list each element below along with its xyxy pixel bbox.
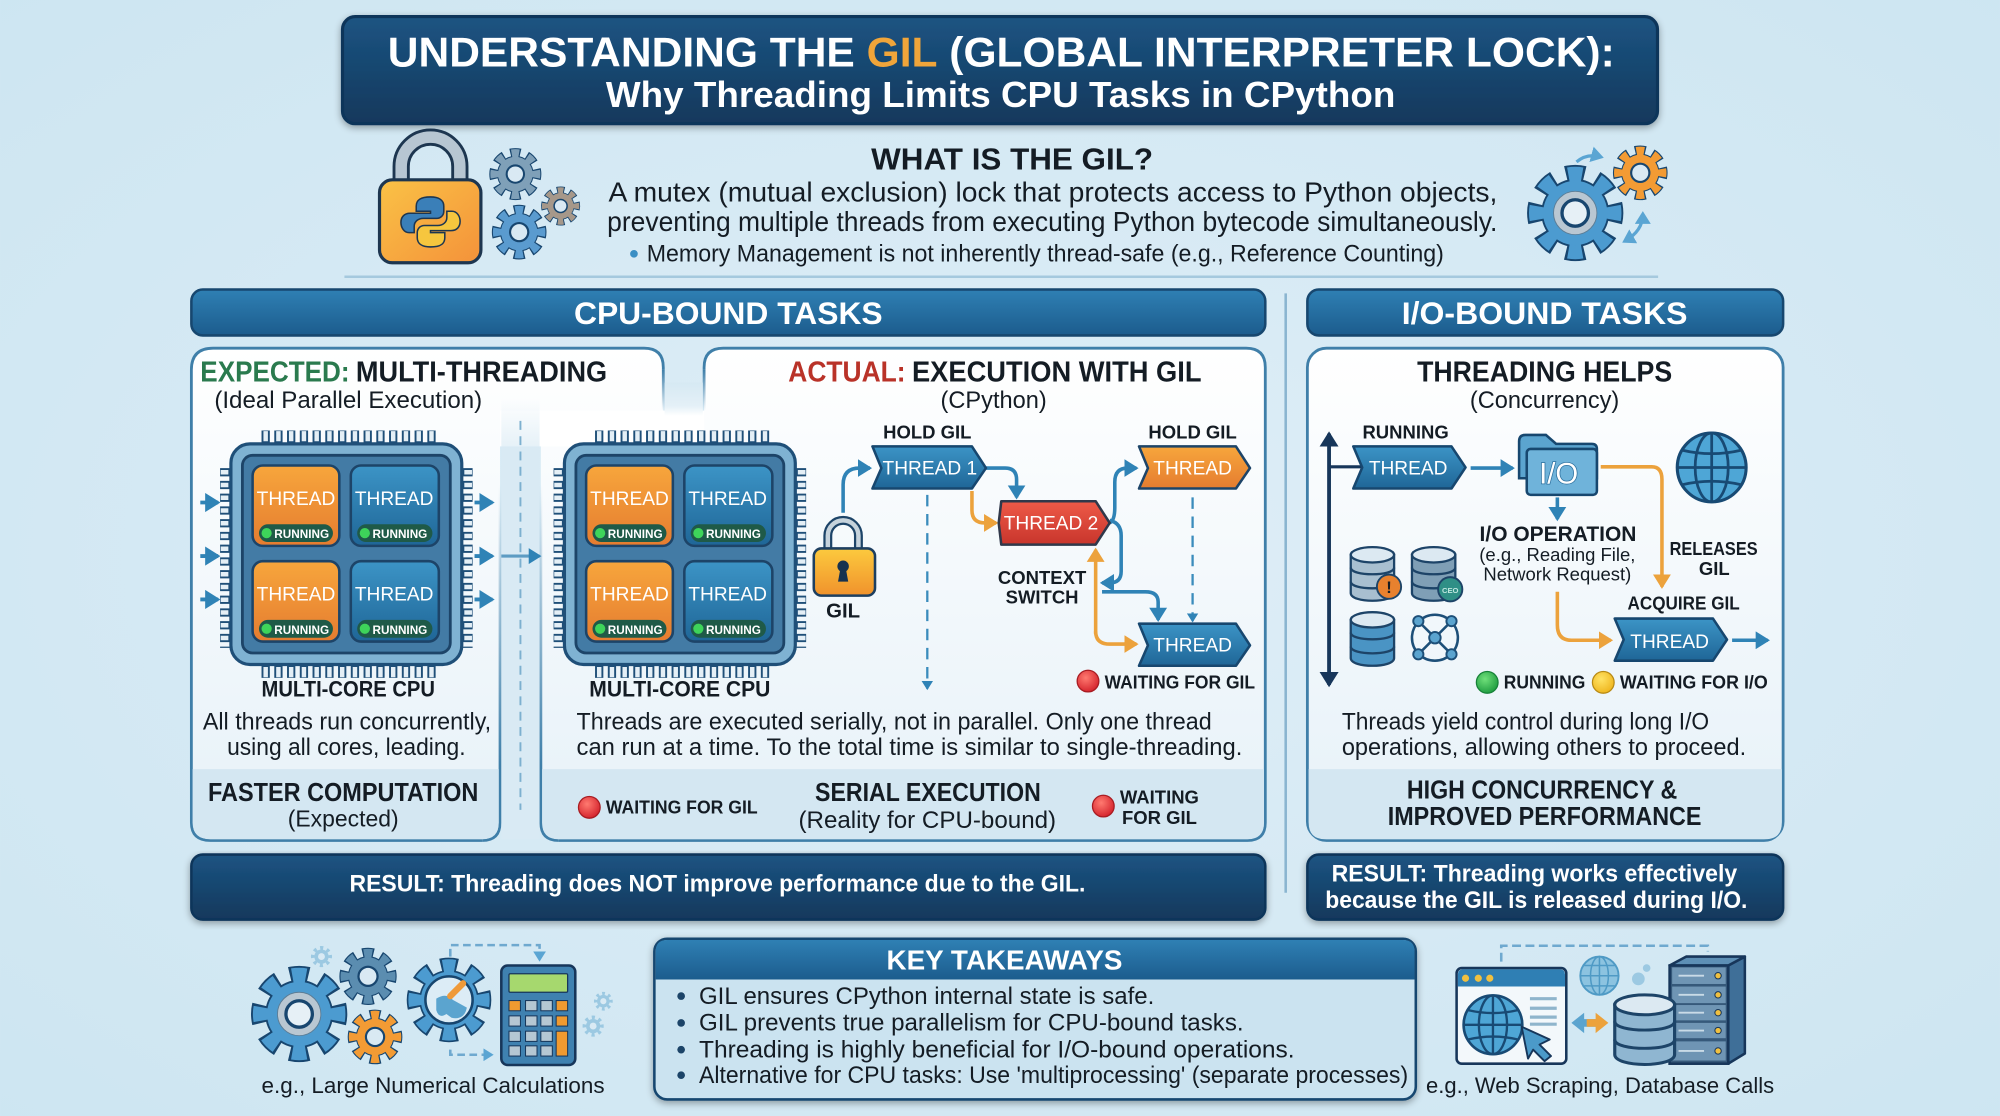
bullets <box>677 992 685 1079</box>
takeaway 4: Alternative for CPU tasks: Use 'multiprocessing' (separate processes) <box>699 1062 1408 1088</box>
result bar: I/O-bound <box>1307 855 1783 920</box>
arrows in and out <box>200 503 492 599</box>
arrow out <box>1732 639 1768 642</box>
panel: actual execution with GIL: EXECUTION WITH GIL <box>912 356 1202 388</box>
arrow: releases GIL <box>1601 467 1662 587</box>
labels: HOLD GIL <box>883 422 971 443</box>
icon: multi-core CPU expected: THREAD <box>257 489 335 510</box>
icon: multi-core CPU actual: THREAD <box>590 585 669 606</box>
thread 2: THREAD 2 <box>1004 513 1098 534</box>
waiting legend right <box>1092 787 1199 828</box>
heading: THREADING HELPS <box>1417 356 1672 388</box>
panel: actual execution with GIL <box>541 348 1265 841</box>
icon: multi-core CPU actual: THREAD <box>688 489 767 510</box>
bullet: Memory Management is not inherently thread-safe (e.g., Reference Counting) <box>647 240 1444 266</box>
I/O flow diagram <box>1329 422 1768 693</box>
icon: multi-core CPU expected: THREAD <box>257 585 335 606</box>
outcome: HIGH CONCURRENCY & <box>1407 776 1677 804</box>
definition line 2: preventing multiple threads from executing Python bytecode simultaneously. <box>607 206 1497 237</box>
small globe <box>1580 957 1650 995</box>
description: Threads are executed serially, not in parallel. Only one thread <box>577 709 1212 736</box>
definition line 1: A mutex (mutual exclusion) lock that protects access to Python objects, <box>608 177 1497 208</box>
exchange arrows <box>1571 1013 1597 1033</box>
arrow: to operation <box>1556 497 1559 519</box>
thread flow diagram: HOLD GIL <box>1148 422 1237 443</box>
subheading: (Ideal Parallel Execution) <box>214 387 482 413</box>
outcome: SERIAL EXECUTION <box>815 779 1041 807</box>
title line 1: UNDERSTANDING THE GIL (GLOBAL INTERPRETER LOCK): <box>388 28 1615 75</box>
icon: multi-core CPU actual: RUNNING <box>706 623 761 637</box>
label releases: RELEASES <box>1670 538 1758 559</box>
what is the GIL text block <box>607 143 1497 266</box>
waiting legend left: WAITING FOR GIL <box>606 797 758 818</box>
caption: I/O example: e.g., Web Scraping, Database Calls <box>1426 1073 1774 1098</box>
thread running <box>1353 446 1466 488</box>
thread flow diagram <box>843 422 1255 693</box>
result bar: CPU-bound <box>191 855 1265 920</box>
timeline arrow <box>1329 434 1362 685</box>
icon: databases and network <box>1351 547 1462 666</box>
icon: globe <box>1677 433 1746 502</box>
panel: expected multi-threading: MULTI-THREADING <box>356 356 607 388</box>
label: multi-core CPU: MULTI-CORE CPU <box>262 676 435 701</box>
icon: databases and network: ! <box>1386 578 1392 597</box>
icon: multi-core CPU actual: RUNNING <box>608 623 663 637</box>
takeaway 2: GIL prevents true parallelism for CPU-bound tasks. <box>699 1010 1244 1036</box>
thread 1: THREAD 1 <box>883 458 977 479</box>
header <box>656 940 1415 980</box>
arrow to I/O <box>1471 467 1513 469</box>
icon: multi-core CPU expected <box>200 436 492 672</box>
result band <box>1309 769 1782 839</box>
legend: RUNNING <box>1504 672 1585 693</box>
thread running: THREAD <box>1369 458 1447 479</box>
waiting legend right: WAITING <box>1120 787 1199 808</box>
server <box>1670 957 1745 1064</box>
outcome: FASTER COMPUTATION <box>208 777 478 807</box>
thread flow diagram: SWITCH <box>1006 586 1079 607</box>
header: KEY TAKEAWAYS <box>886 944 1122 975</box>
icon: I/O folder: I/O <box>1539 457 1578 490</box>
waiting status: WAITING FOR GIL <box>1105 672 1255 693</box>
icon: I/O folder <box>1519 435 1597 495</box>
header: I/O-bound tasks <box>1307 290 1783 335</box>
thread hold: THREAD <box>1153 458 1232 479</box>
caption: CPU example: e.g., Large Numerical Calculations <box>262 1073 605 1098</box>
icon: multi-core CPU expected: RUNNING <box>274 527 329 541</box>
label: GIL: GIL <box>826 600 860 622</box>
heading: WHAT IS THE GIL? <box>871 143 1153 177</box>
icon: multi-core CPU actual: RUNNING <box>608 527 663 541</box>
icon: multi-core CPU expected: THREAD <box>355 585 433 606</box>
panel: expected multi-threading: (Expected) <box>288 805 399 831</box>
panel: actual execution with GIL: can run at a time. To the total time is similar to single-threading. <box>577 734 1242 761</box>
result band <box>542 769 1264 839</box>
browser window <box>1457 968 1566 1064</box>
subheading: (Concurrency) <box>1470 387 1619 413</box>
icon: multi-core CPU actual: RUNNING <box>706 527 761 541</box>
I/O operation label: (e.g., Reading File, <box>1479 544 1635 565</box>
icon: multi-core CPU expected: RUNNING <box>274 623 329 637</box>
icon: gears with arrows <box>1531 148 1665 257</box>
calculator <box>501 965 575 1065</box>
heading: ACTUAL: <box>788 356 906 388</box>
title line 2: Why Threading Limits CPU Tasks in CPython <box>606 75 1395 115</box>
thread waiting <box>1139 624 1250 666</box>
icon: multi-core CPU expected: RUNNING <box>372 527 427 541</box>
result bar: I/O-bound: because the GIL is released during I/O. <box>1325 887 1747 914</box>
I/O operation label: Network Request) <box>1483 563 1631 584</box>
thread flow diagram: CONTEXT <box>998 567 1087 588</box>
icon: multi-core CPU actual: THREAD <box>688 585 767 606</box>
label acquire: ACQUIRE GIL <box>1628 593 1740 614</box>
thread 2 <box>999 501 1110 545</box>
I/O flow diagram: GIL <box>1699 558 1730 579</box>
label running: RUNNING <box>1362 422 1449 443</box>
icon: GIL padlock <box>814 520 875 596</box>
arrow: expected to actual <box>501 555 540 557</box>
panel: threading helps <box>1307 348 1783 841</box>
panel: actual execution with GIL: (Reality for CPU-bound) <box>798 807 1056 833</box>
description: Threads yield control during long I/O <box>1342 709 1709 736</box>
takeaway 3: Threading is highly beneficial for I/O-bound operations. <box>699 1036 1295 1062</box>
icon: python padlock with gears <box>380 137 578 263</box>
panel: key takeaways <box>654 939 1416 1099</box>
thread waiting: THREAD <box>1153 636 1232 657</box>
header: CPU-bound tasks: CPU-BOUND TASKS <box>574 295 883 331</box>
thread acquire: THREAD <box>1630 632 1709 653</box>
arrows <box>843 468 1193 689</box>
icon: multi-core CPU expected: THREAD <box>355 489 433 510</box>
heading: EXPECTED: <box>200 356 350 388</box>
icon: multi-core CPU expected: RUNNING <box>372 623 427 637</box>
arrow: back to thread <box>1557 592 1611 640</box>
panel: expected multi-threading <box>191 348 663 841</box>
label: multi-core CPU: MULTI-CORE CPU <box>589 676 770 701</box>
header: CPU-bound tasks <box>191 290 1265 335</box>
panel: threading helps: operations, allowing others to proceed. <box>1342 734 1746 761</box>
title banner <box>343 17 1657 124</box>
subheading: (CPython) <box>941 387 1047 413</box>
icon: databases and network: CEO <box>1442 586 1459 595</box>
description: All threads run concurrently, <box>203 709 491 736</box>
thread acquire <box>1615 619 1727 661</box>
panel: threading helps: IMPROVED PERFORMANCE <box>1388 803 1701 831</box>
icon: gears and calculator <box>255 945 612 1065</box>
thread 1 <box>872 446 986 488</box>
legend <box>1476 672 1768 693</box>
icon: multi-core CPU actual: THREAD <box>590 489 669 510</box>
takeaway 1: GIL ensures CPython internal state is safe. <box>699 983 1154 1009</box>
icon: browser, database and server <box>1457 946 1745 1064</box>
database <box>1615 995 1675 1064</box>
I/O operation label <box>1479 521 1636 584</box>
result band <box>193 769 499 839</box>
result bar: I/O-bound: RESULT: Threading works effectively <box>1332 860 1738 887</box>
panel: expected multi-threading: using all cores, leading. <box>227 734 466 761</box>
waiting legend right: FOR GIL <box>1122 807 1197 828</box>
legend: WAITING FOR I/O <box>1620 672 1768 693</box>
thread hold <box>1139 446 1250 488</box>
icon: multi-core CPU actual <box>558 436 802 672</box>
I/O operation label: I/O OPERATION <box>1480 521 1636 546</box>
result bar: CPU-bound: RESULT: Threading does NOT improve performance due to the GIL. <box>350 871 1085 898</box>
header: I/O-bound tasks: I/O-BOUND TASKS <box>1402 295 1687 331</box>
